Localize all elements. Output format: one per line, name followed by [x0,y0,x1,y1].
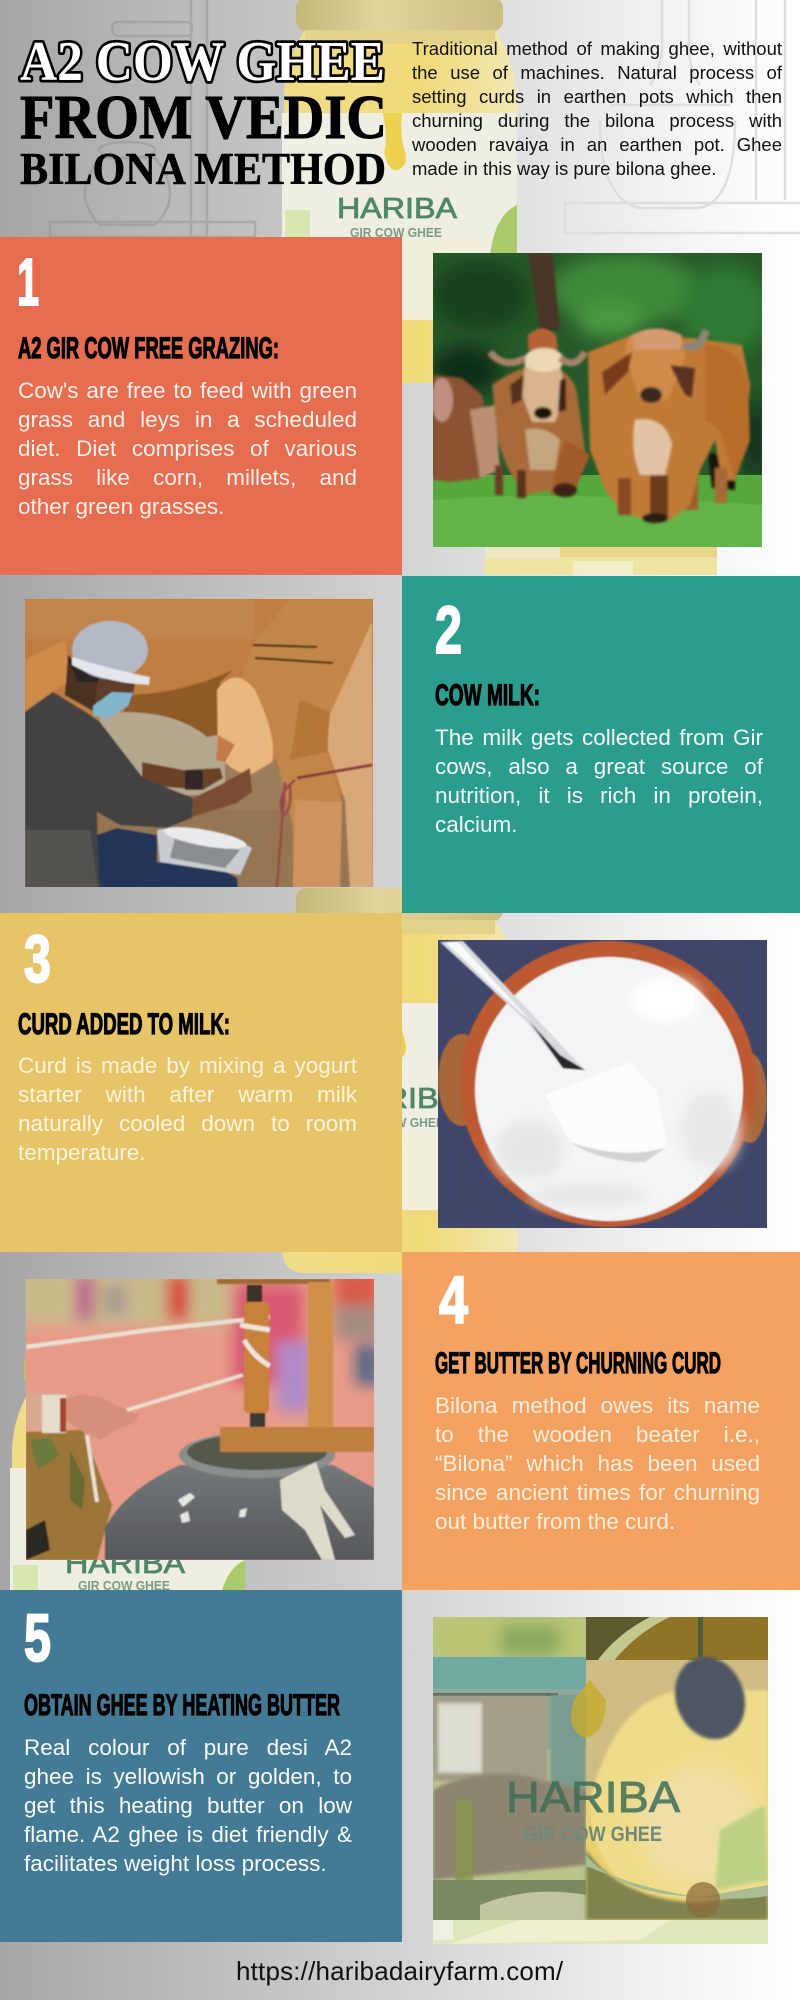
panel: step 2 [402,576,800,913]
floor [100,712,230,802]
panel: step 4 [402,1252,800,1590]
number 3: 3 [24,922,51,997]
body text 1: grass and leys in a scheduled [18,407,357,432]
panel: step 3 [0,913,402,1252]
heading 2: COW MILK: [435,679,540,712]
body text 3: temperature. [18,1140,146,1165]
bucket [157,828,252,875]
line art: right churn [565,0,800,233]
number 1: 1 [17,245,39,320]
right cow [708,452,735,490]
rope [297,765,372,778]
intro text block [412,38,782,179]
jar 2 middle: HARIBA [340,1083,461,1115]
intro text block: setting curds in earthen pots which then [412,86,782,107]
overlay text: HARIBA [506,1773,681,1822]
front arm [192,768,252,817]
thigh and legs [240,600,372,888]
intro text block: churning during the bilona process with [412,110,782,131]
photo: cows grazing [433,253,762,547]
udder [217,678,273,775]
intro text block: Traditional method of making ghee, without [412,38,782,59]
intro text block: wooden ravaiya in an earthen pot. Ghee [412,134,782,155]
body text 5: flame. A2 ghee is diet friendly & [24,1822,352,1847]
back arm [142,762,223,790]
photo: ghee heating with jar overlay [433,1617,768,1944]
body text 5: get this heating butter on low [24,1793,352,1818]
body text 2 [435,725,764,837]
post and bars [217,1279,330,1284]
heading 3: CURD ADDED TO MILK: [18,1008,230,1041]
body text 3 [18,1053,357,1165]
photo: bilona churn and pot [26,1279,374,1560]
body text 4: “Bilona” which has been used [435,1451,760,1476]
pot [105,1465,374,1560]
body text 1 [18,378,357,519]
body text 2: The milk gets collected from Gir [435,725,763,750]
ropes [26,1317,270,1347]
dress [26,1430,112,1560]
panel: step 5 [0,1590,402,1942]
churn stick [247,1285,262,1305]
body text 1: other green grasses. [18,494,224,519]
belly shadow [123,670,233,737]
intro text block: made in this way is pure bilona ghee. [412,158,716,179]
left cow [528,328,558,350]
line art: left churn [50,0,255,237]
jar 0 behind panel 1 bottom [485,547,717,575]
body text 5: facilitates weight loss process. [24,1851,327,1876]
shirt [25,692,193,888]
number 2: 2 [435,593,462,668]
panel: step 1 [0,237,402,575]
arm and hand [26,1392,68,1430]
body text 2: calcium. [435,812,518,837]
body text 5 [24,1735,352,1876]
jar 2 middle [282,888,517,1273]
photo: curd in clay bowl [438,940,767,1228]
jar 2 middle: GIR COW GHEE [352,1115,444,1130]
far cows [433,375,490,482]
jar 3 lower left: GIR COW GHEE [78,1578,170,1593]
body text 3: naturally cooled down to room [18,1111,357,1136]
title [18,31,387,194]
website url: https://haribadairyfarm.com/ [236,1956,563,1986]
body text 3: Curd is made by mixing a yogurt [18,1053,357,1078]
heading 1: A2 GIR COW FREE GRAZING: [18,332,279,365]
milk drips [280,1462,355,1560]
body text 4: since ancient times for churning [435,1480,760,1505]
photo: ghee heating with jar overlay: GIR COW GHEE [524,1823,662,1846]
number 4: 4 [439,1263,468,1338]
body text 1: Cow's are free to feed with green [18,378,357,403]
jar 1 header: GIR COW GHEE [350,225,442,240]
photo: man milking cow [25,599,373,887]
body text 2: nutrition, it is rich in protein, [435,783,763,808]
body text 1: grass like corn, millets, and [18,465,357,490]
title: BILONA METHOD [20,144,386,194]
left half [433,1617,586,1657]
body text 5: Real colour of pure desi A2 [24,1735,352,1760]
heading 5: OBTAIN GHEE BY HEATING BUTTER [24,1689,340,1722]
body text 4 [435,1393,760,1534]
pants [88,828,238,888]
right half [586,1617,768,1920]
body text 3: starter with after warm milk [18,1082,357,1107]
intro text block: the use of machines. Natural process of [412,62,782,83]
jar 3 lower left [10,1353,245,1738]
number 5: 5 [24,1601,51,1676]
jar 1 header: HARIBA [337,193,458,225]
body text 4: Bilona method owes its name [435,1393,760,1418]
body text 5: ghee is yellowish or golden, to [24,1764,352,1789]
head [65,655,100,712]
body text 4: to the wooden beater i.e., [435,1422,760,1447]
body text 4: out butter from the curd. [435,1509,675,1534]
body text 1: diet. Diet comprises of various [18,436,357,461]
jar 1 header [282,0,517,383]
jar 3 lower left: HARIBA [65,1548,186,1580]
body text 2: cows, also a great source of [435,754,763,779]
